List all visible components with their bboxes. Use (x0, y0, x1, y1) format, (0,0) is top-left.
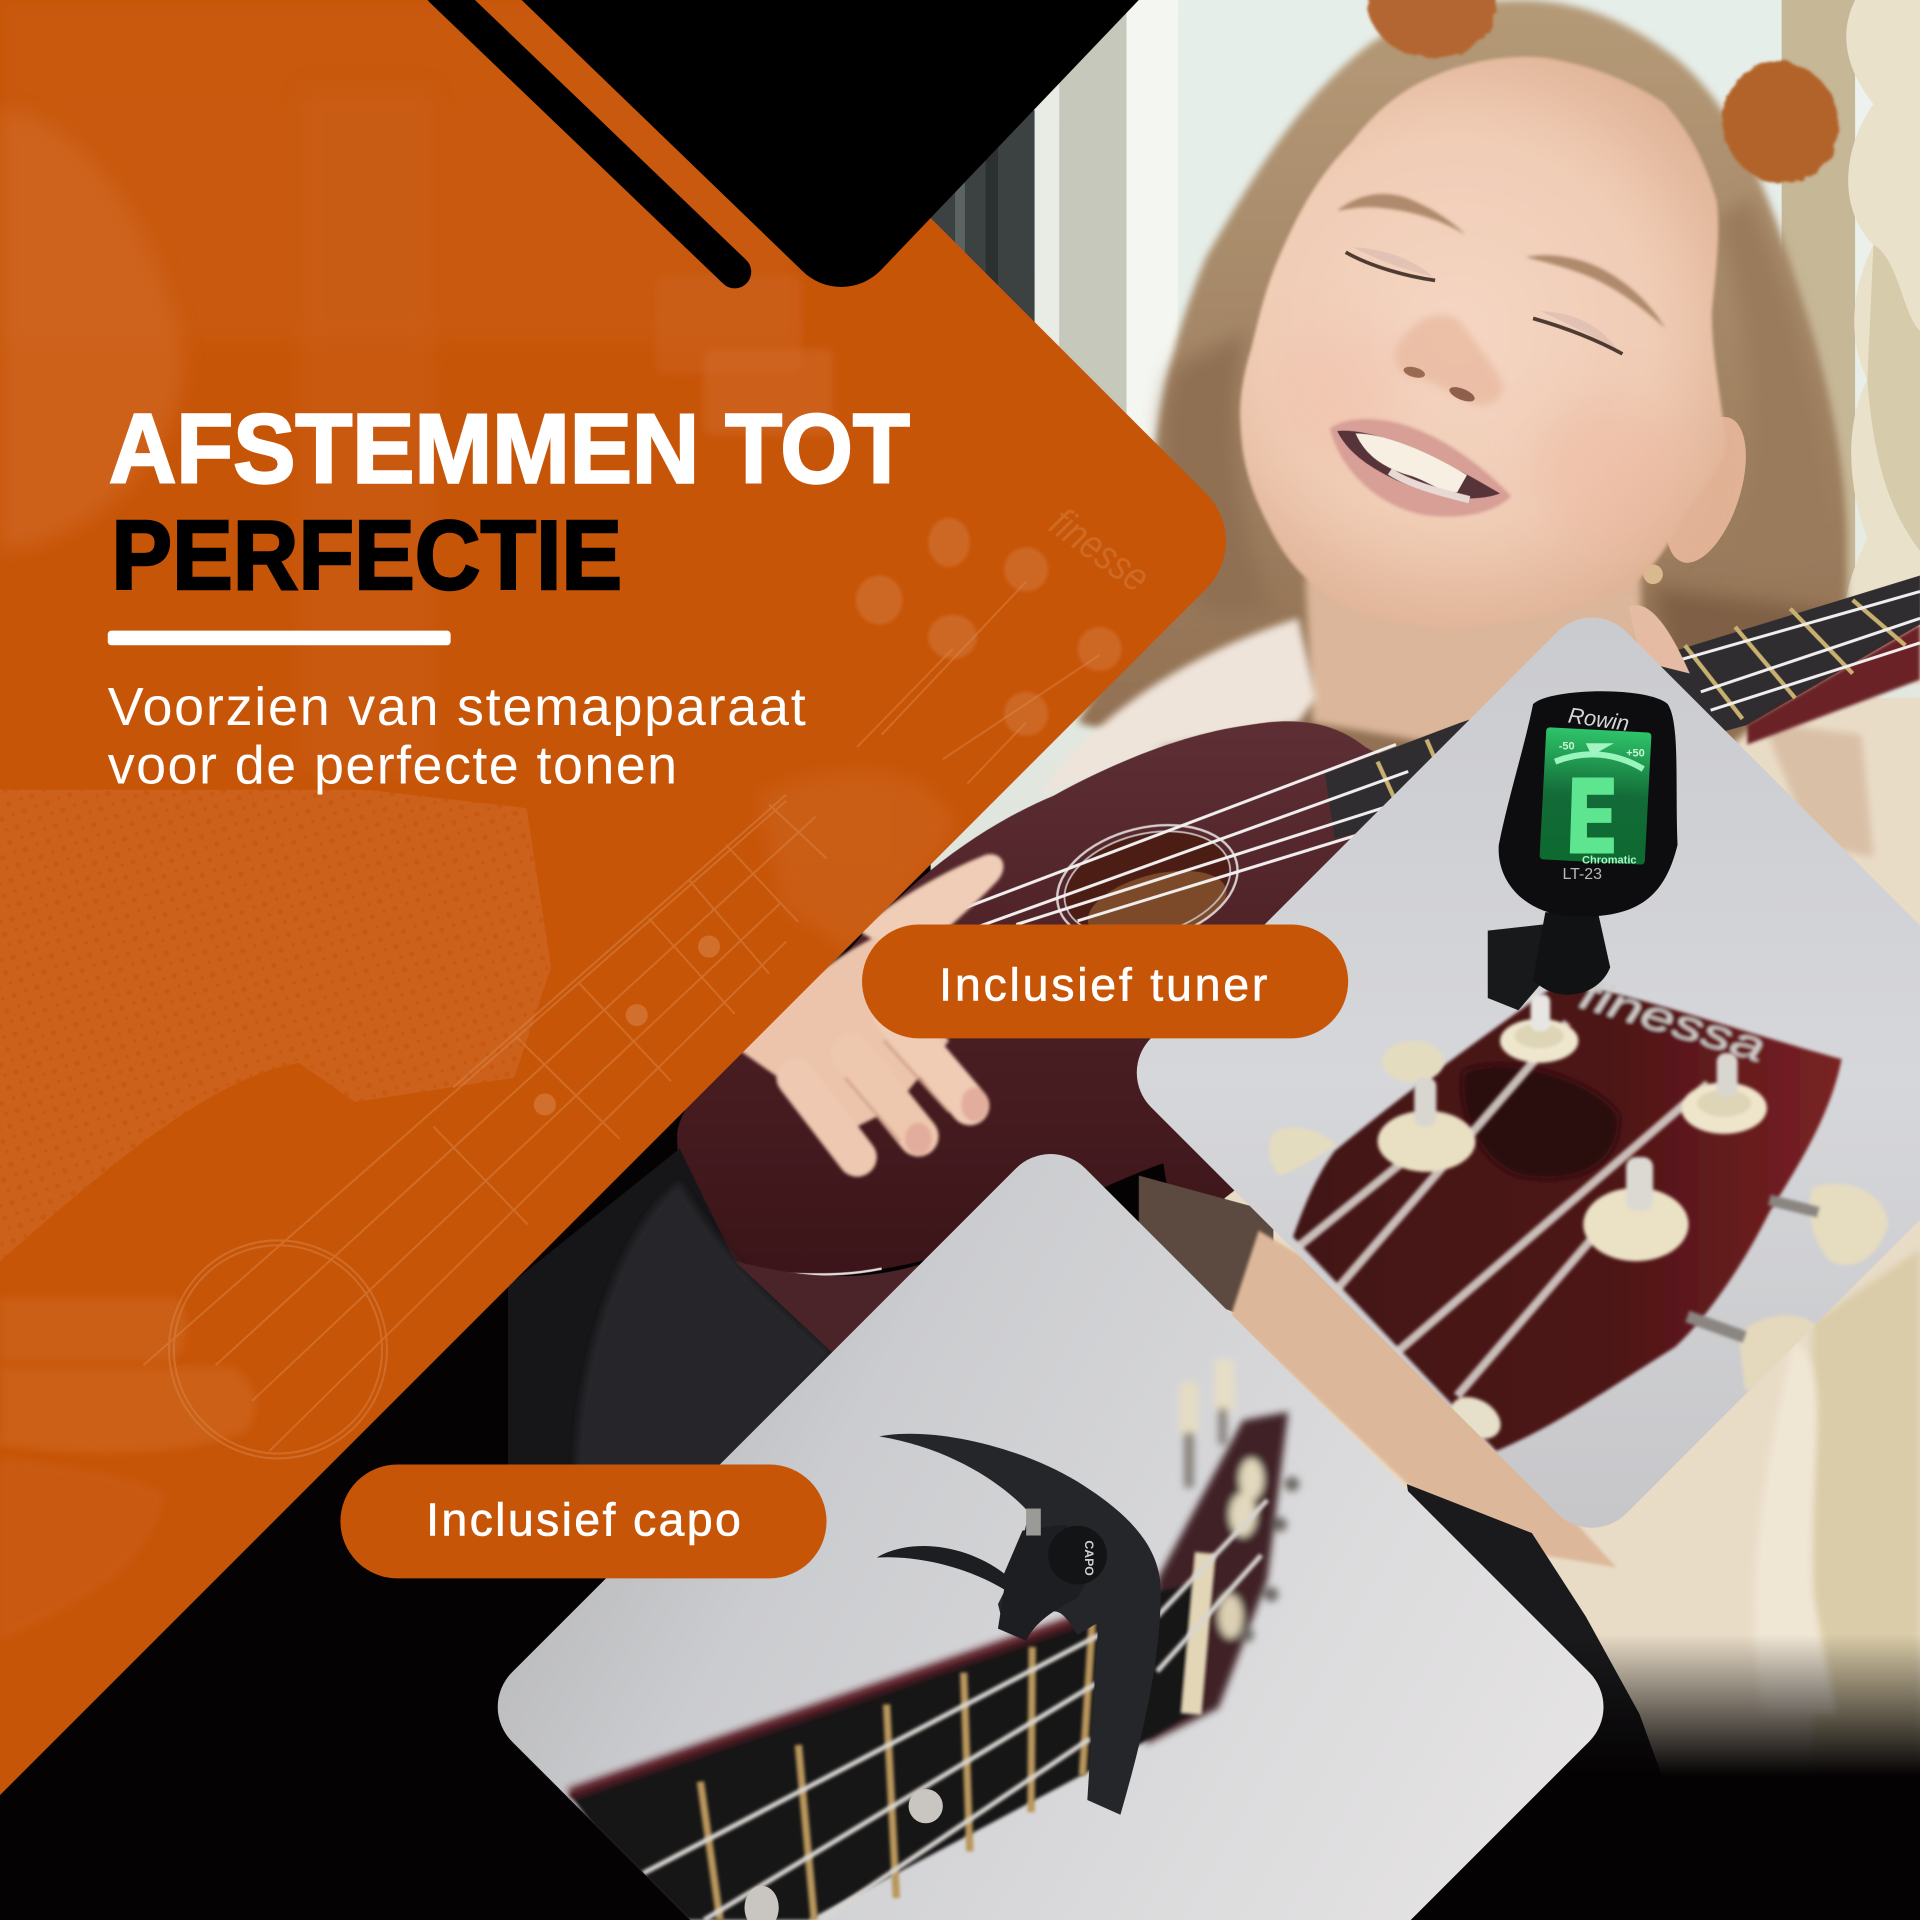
black chevron at top (522, 0, 1139, 287)
ghost photo overlay (0, 0, 1158, 1641)
clip-on tuner: Rowin (1567, 703, 1631, 736)
shadowed lower fade (1347, 1635, 1920, 1776)
ear and earring (1643, 407, 1762, 584)
ukulele body (677, 721, 1408, 1275)
subtitle text: Voorzien van stemapparaat (108, 677, 806, 737)
face features (1267, 194, 1684, 545)
capo clamp: CAPO (1082, 1540, 1096, 1576)
tuning pegs and strings (1269, 994, 1888, 1447)
subtitle text: voor de perfecte tonen (108, 736, 677, 796)
callout: inclusief tuner (862, 924, 1348, 1038)
headstock (1293, 970, 1842, 1451)
clip-on tuner: +50 (1626, 748, 1645, 760)
lower body reflection (784, 1269, 882, 1274)
capo clamp (877, 1434, 1161, 1815)
arm between product cards (1139, 1176, 1714, 1920)
panel: capo product photo (465, 1139, 1641, 1920)
panel: orange diagonal shape (0, 0, 1226, 1795)
headstock blurred (1145, 1359, 1299, 1745)
clip-on tuner: LT-23 (1562, 866, 1602, 883)
background photo: girl with ukulele (508, 0, 1920, 1920)
face (1240, 57, 1727, 628)
playing hand (735, 854, 1003, 1157)
panel: tuner product photo (1136, 618, 1920, 1528)
lower right skin and fabric base (1224, 698, 1920, 1920)
clip-on tuner: -50 (1559, 740, 1575, 752)
trousers (508, 1149, 1053, 1469)
sound hole (1045, 807, 1250, 961)
title: afstemmen tot: AFSTEMMEN TOT (109, 393, 910, 503)
curtain (1844, 0, 1920, 686)
callout: inclusief capo: Inclusief capo (426, 1494, 741, 1546)
ghost photo overlay: finesse (1042, 498, 1158, 601)
black diagonal stripe (441, 0, 735, 272)
subtitle text (108, 677, 806, 796)
hair (1078, 0, 1847, 784)
clip-on tuner: Chromatic (1582, 854, 1637, 866)
smiling mouth (1330, 419, 1511, 517)
title: perfectie: PERFECTIE (111, 500, 622, 610)
capo fretboard (569, 1500, 1267, 1920)
callout: inclusief capo (340, 1464, 827, 1578)
neck and shoulders (1041, 576, 1641, 796)
title underline bar (108, 631, 451, 645)
clip-on tuner (1488, 691, 1678, 1010)
callout: inclusief tuner: Inclusief tuner (939, 958, 1267, 1010)
window and wall (931, 0, 1920, 882)
headstock: finessa (1575, 970, 1771, 1071)
ukulele neck and fretboard (931, 576, 1920, 931)
pom-pom hair ties (1369, 0, 1855, 200)
